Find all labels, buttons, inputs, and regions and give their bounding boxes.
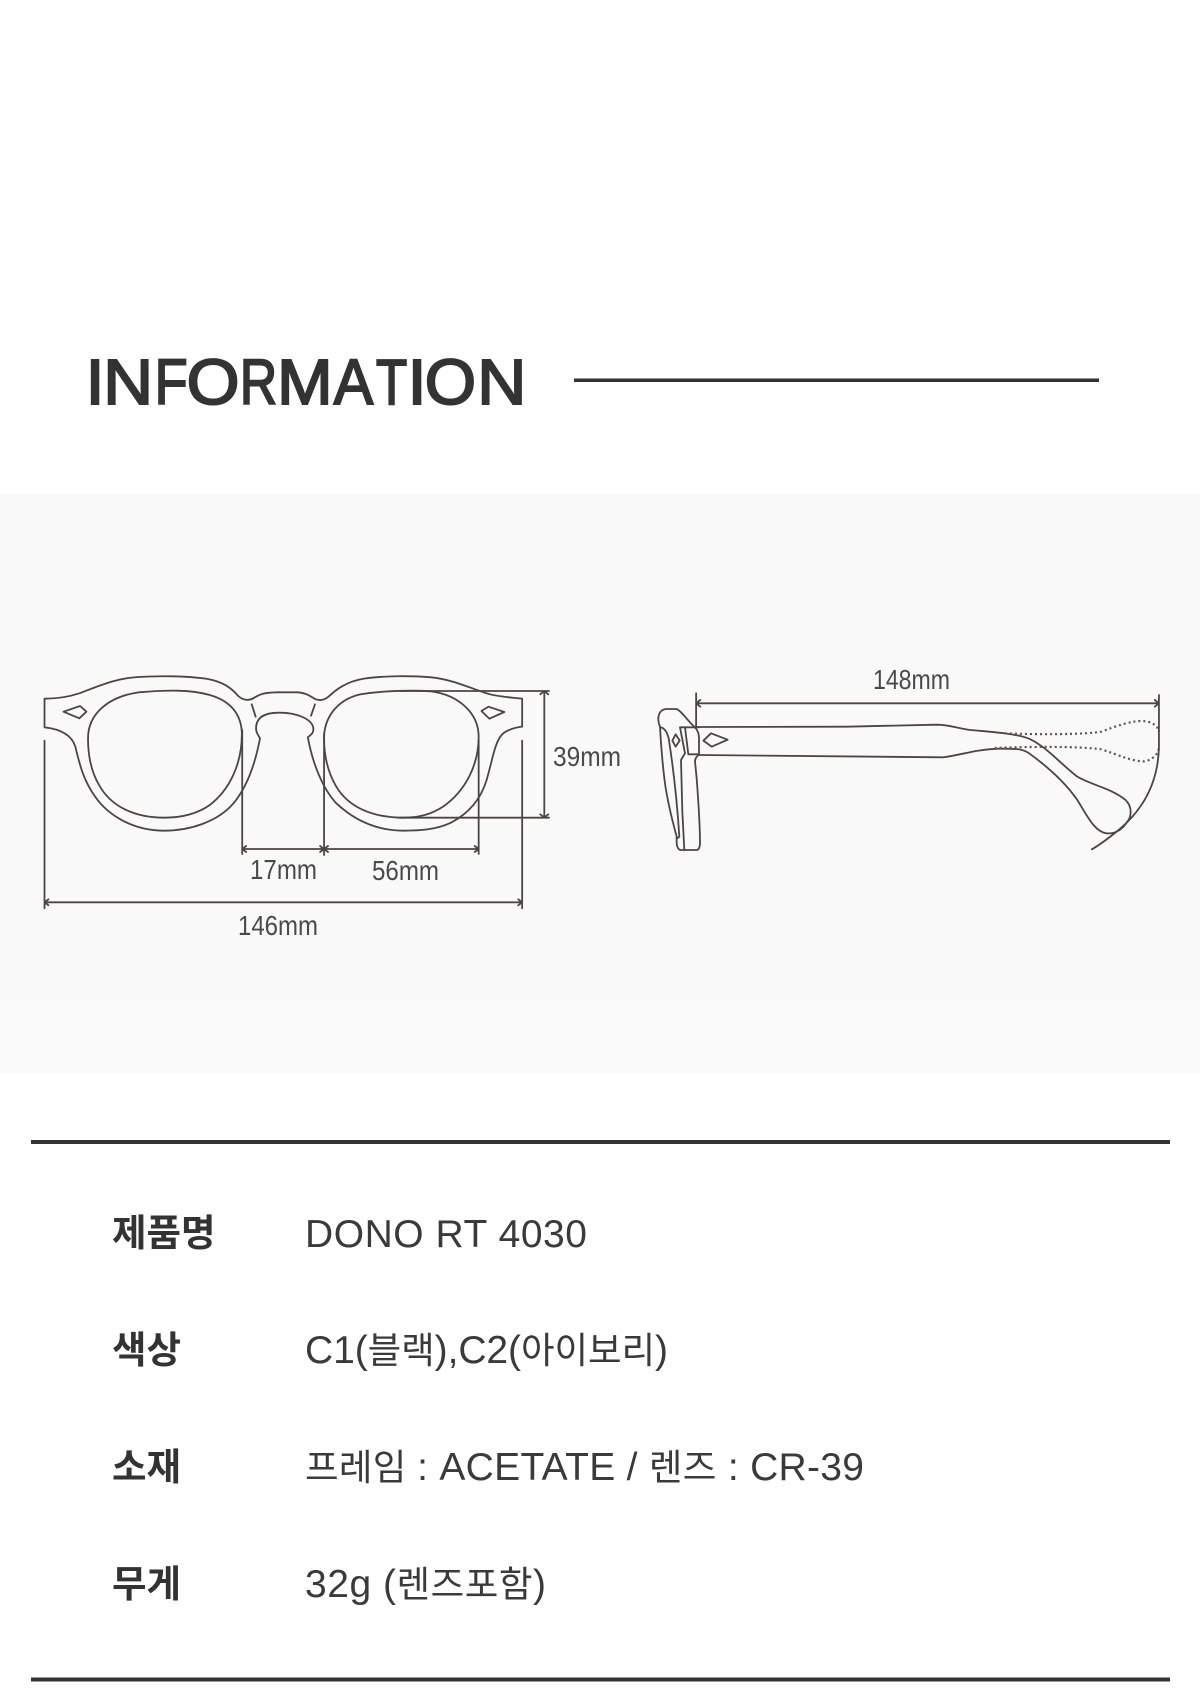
temple diamond xyxy=(703,733,728,747)
frame outline xyxy=(45,676,522,831)
panel background xyxy=(0,494,1200,1073)
right lens xyxy=(324,691,479,818)
label: 제품명 xyxy=(112,1202,216,1257)
heading text: N xyxy=(103,346,153,418)
small rivet diamond xyxy=(672,734,680,747)
heading text: R xyxy=(240,346,277,418)
diagram: front view of glasses xyxy=(45,676,549,908)
label: 17mm: 17mm xyxy=(250,854,317,885)
row: weight xyxy=(112,1553,546,1608)
heading text: O xyxy=(425,346,476,418)
dimension lines and end curve xyxy=(696,693,1159,849)
front frame profile xyxy=(658,709,728,850)
label: 148mm: 148mm xyxy=(873,664,950,695)
heading text: M xyxy=(277,346,333,418)
label: 56mm: 56mm xyxy=(372,855,439,886)
heading text: I xyxy=(408,346,427,418)
row: product name xyxy=(112,1202,587,1257)
table: product specifications xyxy=(112,1202,864,1608)
panel: product dimension diagrams xyxy=(0,494,1200,1073)
heading text: F xyxy=(155,346,188,418)
heading text: O xyxy=(187,346,240,418)
value: C1(블랙),C2(아이보리) xyxy=(305,1329,668,1372)
title: INFORMATION heading with rule xyxy=(86,346,1099,418)
bridge ticks xyxy=(252,704,315,717)
row: colour xyxy=(112,1319,668,1374)
left lens xyxy=(88,691,242,818)
diagram: side view of glasses xyxy=(658,693,1159,850)
heading text: A xyxy=(334,346,373,418)
left rivet diamond xyxy=(63,706,86,718)
label: 146mm: 146mm xyxy=(238,910,318,941)
heading rule xyxy=(574,378,1099,382)
panel lower band xyxy=(0,995,1200,1073)
top table rule xyxy=(31,1140,1170,1144)
heading text: T xyxy=(376,346,407,418)
label: 무게 xyxy=(112,1553,181,1608)
temple and dimension xyxy=(696,693,1159,849)
value: DONO RT 4030 xyxy=(305,1213,587,1256)
frame inner lines xyxy=(660,727,699,850)
frame contour xyxy=(658,709,700,850)
heading text: N xyxy=(477,346,526,418)
value: 프레임 : ACETATE / 렌즈 : CR-39 xyxy=(305,1446,864,1489)
value: 32g (렌즈포함) xyxy=(305,1563,546,1606)
label: 소재 xyxy=(112,1436,181,1491)
row: material xyxy=(112,1436,864,1491)
dotted straight-temple outline xyxy=(995,721,1159,761)
label: 색상 xyxy=(112,1319,181,1374)
label: 39mm: 39mm xyxy=(553,741,621,772)
right rivet diamond xyxy=(481,707,504,719)
heading text: I xyxy=(86,346,105,418)
dimension lines xyxy=(45,691,549,908)
bottom table rule xyxy=(31,1678,1170,1682)
temple arm xyxy=(696,725,1131,833)
